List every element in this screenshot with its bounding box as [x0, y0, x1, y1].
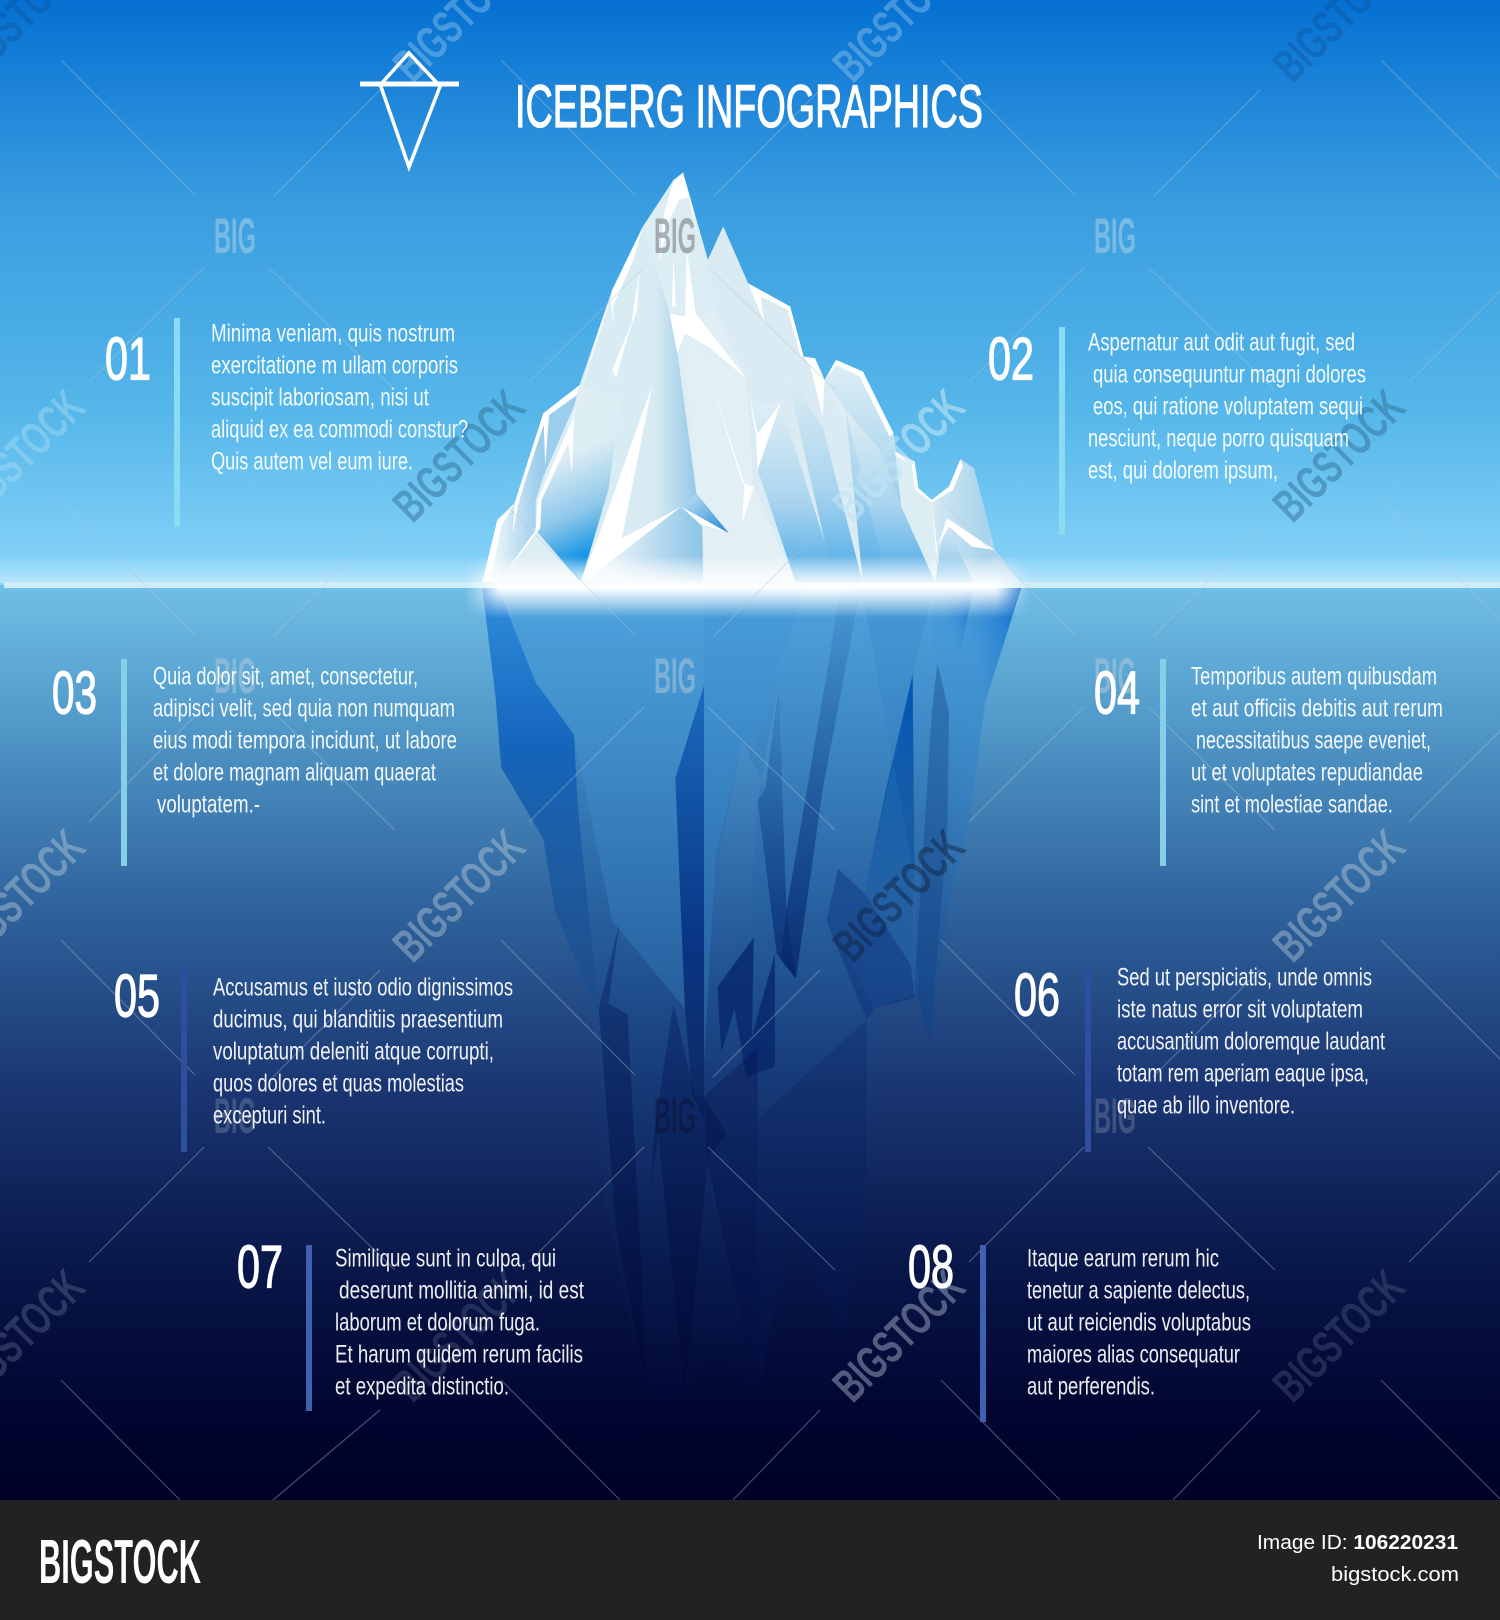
watermarks: BIGSTOCK: BIGSTOCK — [1262, 1259, 1414, 1411]
left lobe — [482, 503, 536, 583]
footer bar: BIGSTOCK — [39, 1528, 201, 1597]
panel: item 01: Minima veniam, quis nostrum — [211, 320, 455, 348]
watermarks: BIG: BIG — [214, 1088, 256, 1144]
watermarks: BIGSTOCK: BIGSTOCK — [382, 1259, 534, 1411]
watermarks: BIGSTOCK: BIGSTOCK — [822, 1259, 974, 1411]
panel: item 06: iste natus error sit voluptatem — [1117, 996, 1363, 1024]
watermarks: BIG: BIG — [654, 1088, 696, 1144]
watermarks: BIG: BIG — [214, 648, 256, 704]
underwater lower facets — [827, 869, 915, 1020]
panel: item 07: deserunt mollitia animi, id est — [339, 1276, 584, 1304]
watermarks: BIG: BIG — [214, 208, 256, 264]
text: BIG — [1094, 1088, 1136, 1144]
panel: item 02: 02 — [988, 326, 1034, 392]
watermarks: BIG: BIG — [654, 648, 696, 704]
panel: item 03: Quia dolor sit, amet, consectetur, — [153, 662, 418, 690]
panel: item 03: 03 — [52, 660, 97, 726]
panel: item 04 — [1094, 659, 1443, 866]
panel: item 06: totam rem aperiam eaque ipsa, — [1117, 1060, 1369, 1088]
panel: item 03: et dolore magnam aliquam quaerat — [153, 758, 436, 786]
panel: item 07 — [237, 1234, 584, 1411]
panel: item 01: 01 — [105, 326, 151, 392]
underwater centre right facet — [704, 586, 804, 1064]
right facets — [708, 227, 899, 583]
panel: item 08: maiores alias consequatur — [1027, 1340, 1240, 1368]
panel: item 06: 06 — [1014, 962, 1060, 1028]
watermarks: BIG: BIG — [654, 208, 696, 264]
waterline — [4, 582, 1500, 588]
panel: item 03: voluptatem.- — [157, 790, 260, 818]
footer site: bigstock.com — [1331, 1564, 1459, 1586]
panel: item 06 — [1014, 962, 1385, 1152]
panel: item 06: accusantium doloremque laudant — [1117, 1028, 1385, 1056]
footer image id: Image ID: 106220231 — [1257, 1532, 1458, 1554]
panel: item 04: ut et voluptates repudiandae — [1191, 758, 1423, 786]
panel: item 03: eius modi tempora incidunt, ut labore — [153, 726, 457, 754]
panel: item 08: aut perferendis. — [1027, 1372, 1155, 1400]
watermarks: BIGSTOCK: BIGSTOCK — [382, 379, 534, 531]
panel: item 04: sint et molestiae sandae. — [1191, 790, 1393, 818]
panel: item 02: quia consequuntur magni dolores — [1093, 360, 1366, 388]
watermarks: BIGSTOCK: BIGSTOCK — [382, 819, 534, 971]
underwater upper left facet — [482, 586, 599, 1014]
panel: item 05 — [114, 962, 513, 1152]
panel: item 01: exercitatione m ullam corporis — [211, 352, 458, 380]
bright blue left facet — [497, 363, 622, 583]
panel: item 04: 04 — [1094, 660, 1140, 726]
panel: item 08: Itaque earum rerum hic — [1027, 1244, 1219, 1272]
underwater right blue facet — [865, 674, 915, 965]
panel: item 07: Et harum quidem rerum facilis — [335, 1340, 583, 1368]
panel: item 07: et expedita distinctio. — [335, 1372, 509, 1400]
sky background — [0, 0, 1500, 585]
title: ICEBERG INFOGRAPHICS — [515, 73, 983, 140]
panel: item 05: quos dolores et quas molestias — [213, 1070, 464, 1098]
text: BIG — [1094, 208, 1136, 264]
panel: item 03 — [52, 659, 457, 866]
panel: item 01: suscipit laboriosam, nisi ut — [211, 384, 429, 412]
watermarks: BIGSTOCK: BIGSTOCK — [1262, 819, 1414, 971]
panel: item 08: 08 — [908, 1234, 954, 1300]
iceberg above water — [482, 173, 1022, 583]
footer bar — [0, 1500, 1500, 1620]
underwater strand — [781, 586, 861, 979]
panel: item 02: Aspernatur aut odit aut fugit, sed — [1088, 328, 1355, 356]
underwater right edge facets — [932, 586, 974, 713]
watermarks: BIG — [214, 208, 1136, 1144]
panel: item 05: Accusamus et iusto odio dignissimos — [213, 974, 513, 1002]
panel: item 08 — [908, 1234, 1251, 1422]
iceberg silhouette — [482, 173, 1022, 583]
iceberg foam band — [465, 556, 1030, 618]
panel: item 07: Similique sunt in culpa, qui — [335, 1244, 556, 1272]
watermarks: BIGSTOCK: BIGSTOCK — [822, 379, 974, 531]
panel: item 01: aliquid ex ea commodi constur? — [211, 416, 468, 444]
watermarks: BIGSTOCK: BIGSTOCK — [822, 819, 974, 971]
panel: item 02 — [988, 326, 1366, 535]
panel: item 05: excepturi sint. — [213, 1102, 326, 1130]
text: BIG — [1094, 648, 1136, 704]
panel: item 07: laborum et dolorum fuga. — [335, 1308, 540, 1336]
panel: item 01 — [105, 318, 468, 527]
watermarks: BIGSTOCK: BIGSTOCK — [1262, 379, 1414, 531]
panel: item 05: ducimus, qui blanditiis praesentium — [213, 1006, 503, 1034]
panel: item 05: 05 — [114, 962, 160, 1030]
panel: item 05: voluptatum deleniti atque corrupti, — [213, 1038, 494, 1066]
white highlights — [482, 173, 995, 583]
panel: item 06: quae ab illo inventore. — [1117, 1092, 1295, 1120]
panel: item 02: nesciunt, neque porro quisquam — [1088, 424, 1349, 452]
panel: item 07: 07 — [237, 1234, 283, 1300]
underwater body — [482, 586, 1022, 1404]
ocean background — [0, 585, 1500, 1500]
panel: item 02: est, qui dolorem ipsum, — [1088, 456, 1278, 484]
panel: item 01: Quis autem vel eum iure. — [211, 448, 413, 476]
panel: item 06: Sed ut perspiciatis, unde omnis — [1117, 964, 1372, 992]
icon: iceberg logo — [360, 53, 459, 167]
panel: item 08: ut aut reiciendis voluptabus — [1027, 1308, 1251, 1336]
underwater central dark facet — [675, 685, 704, 1118]
waterline glow — [0, 555, 1500, 583]
central facets — [580, 227, 696, 580]
panel: item 08: tenetur a sapiente delectus, — [1027, 1276, 1250, 1304]
iceberg underwater part — [482, 586, 1022, 1404]
panel: item 03: adipisci velit, sed quia non numquam — [153, 694, 455, 722]
panel: item 02: eos, qui ratione voluptatem sequi — [1093, 392, 1363, 420]
